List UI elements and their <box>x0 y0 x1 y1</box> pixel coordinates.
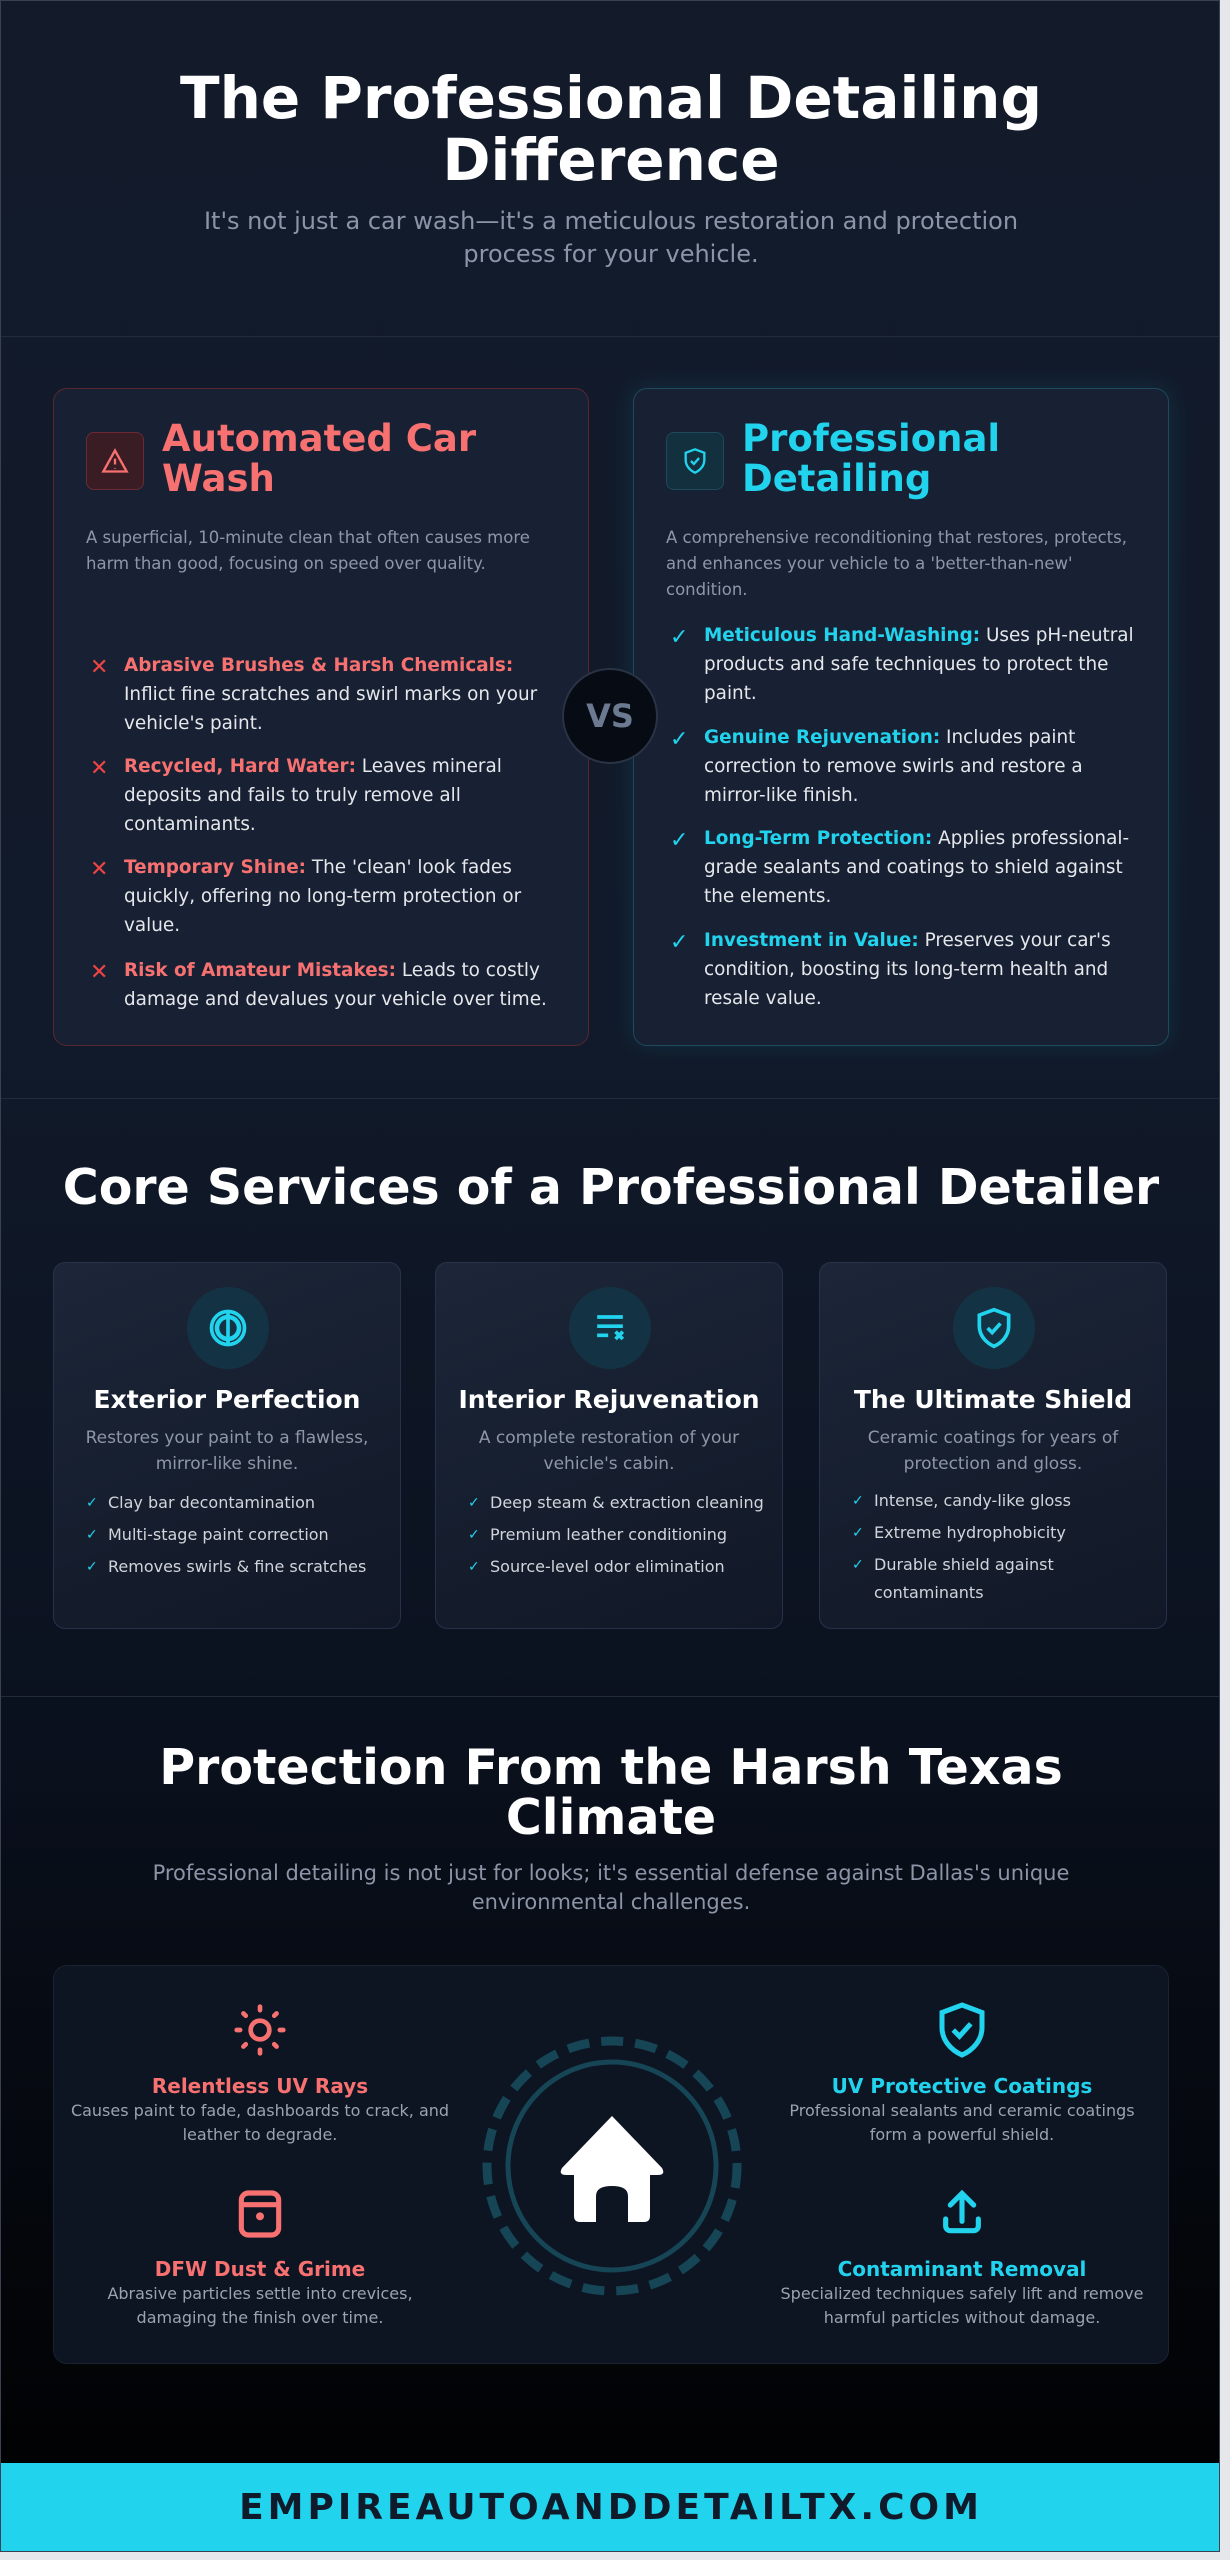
list: drawbacks: Abrasive Brushes & Harsh Chemicals: Inflict fine scratches and swirl marks on your vehicle's paint. <box>124 655 537 734</box>
icon: sun <box>234 2004 286 2056</box>
card: exterior perfection: Restores your paint to a flawless, mirror-like shine. <box>86 1428 368 1474</box>
title <box>180 64 1042 194</box>
panel: automated car wash: ✕ <box>90 756 108 781</box>
list: drawbacks: Recycled, Hard Water: Leaves mineral deposits and fails to truly remove all contaminants. <box>124 756 502 835</box>
list: benefits: Genuine Rejuvenation: Includes paint correction to remove swirls and restore a mirror-like finish. <box>704 727 1083 806</box>
icon: warning <box>86 432 144 490</box>
card: interior rejuvenation: A complete restoration of your vehicle's cabin. <box>479 1428 739 1474</box>
feature: contaminant removal <box>781 2257 1143 2327</box>
vs badge <box>562 668 658 764</box>
card: ultimate shield: Ceramic coatings for years of protection and gloss. <box>868 1428 1118 1474</box>
list: drawbacks: Temporary Shine: The 'clean' look fades quickly, offering no long-term protection or value. <box>124 857 521 936</box>
panel: climate <box>53 1965 1169 2364</box>
card: interior rejuvenation: Source-level odor elimination <box>490 1557 725 1576</box>
heading <box>162 417 476 500</box>
card: ultimate shield: Extreme hydrophobicity <box>874 1523 1066 1542</box>
card: exterior perfection: Removes swirls & fine scratches <box>108 1557 366 1576</box>
graphic: house shield <box>482 2036 742 2296</box>
heading: texas climate: Protection From the Harsh Texas <box>159 1739 1063 1796</box>
heading: texas climate <box>159 1739 1063 1846</box>
icon: shield <box>953 1287 1035 1369</box>
icon: shield check <box>940 2002 984 2058</box>
subtitle: climate: Professional detailing is not just for looks; it's essential defense against Dallas's unique environmental challenges. <box>153 1861 1069 1914</box>
panel: professional detailing: ✓ <box>670 727 688 752</box>
icon: polisher <box>187 1287 269 1369</box>
list: benefits: Investment in Value: Preserves your car's condition, boosting its long-term health and resale value. <box>704 930 1111 1009</box>
panel: professional detailing <box>633 388 1169 1046</box>
feature: uv coatings <box>789 2074 1135 2144</box>
vs badge: VS <box>586 697 634 735</box>
feature: dust: Abrasive particles settle into crevices, damaging the finish over time. <box>107 2284 413 2327</box>
heading: Detailing <box>742 457 931 500</box>
panel: automated car wash: ✕ <box>90 960 108 985</box>
panel: professional detailing: ✓ <box>670 828 688 853</box>
subtitle: It's not just a car wash—it's a meticulous restoration and protection process for your vehicle. <box>204 207 1018 268</box>
feature: uv rays <box>71 2074 449 2144</box>
panel: professional detailing: ✓ <box>670 930 688 955</box>
card: exterior perfection: Multi-stage paint correction <box>108 1525 329 1544</box>
card: exterior perfection <box>53 1262 401 1629</box>
feature: uv coatings: Professional sealants and ceramic coatings form a powerful shield. <box>789 2101 1135 2144</box>
panel: professional detailing: ✓ <box>670 625 688 650</box>
card: interior rejuvenation: Interior Rejuvenation <box>458 1385 760 1414</box>
feature: contaminant removal: Specialized techniques safely lift and remove harmful particles without damage. <box>781 2284 1143 2327</box>
footer: EMPIREAUTOANDDETAILTX.COM <box>239 2487 983 2528</box>
card: ultimate shield: Durable shield against contaminants <box>874 1555 1054 1602</box>
feature: uv coatings: UV Protective Coatings <box>832 2074 1092 2098</box>
card: exterior perfection: Clay bar decontamination <box>108 1493 315 1512</box>
feature: contaminant removal: Contaminant Removal <box>838 2257 1086 2281</box>
heading: Professional <box>742 417 1000 460</box>
icon: dust <box>238 2190 282 2238</box>
icon: list clean <box>569 1287 651 1369</box>
description: A superficial, 10-minute clean that often causes more harm than good, focusing on speed over quality. <box>86 528 530 573</box>
heading: core services: Core Services of a Professional Detailer <box>63 1159 1159 1216</box>
card: ultimate shield <box>819 1262 1167 1629</box>
feature: uv rays: Causes paint to fade, dashboards to crack, and leather to degrade. <box>71 2101 449 2144</box>
panel: automated car wash: ✕ <box>90 857 108 882</box>
card: exterior perfection: Exterior Perfection <box>94 1385 360 1414</box>
list: benefits <box>670 625 1134 1009</box>
heading: Wash <box>162 457 275 500</box>
list: drawbacks: Risk of Amateur Mistakes: Leads to costly damage and devalues your vehicle over time. <box>124 960 547 1010</box>
card: interior rejuvenation <box>435 1262 783 1629</box>
feature: dust: DFW Dust & Grime <box>155 2257 365 2281</box>
footer <box>1 2463 1221 2553</box>
card: interior rejuvenation: Deep steam & extraction cleaning <box>490 1493 764 1512</box>
list: benefits: Meticulous Hand-Washing: Uses pH-neutral products and safe techniques to protect the paint. <box>704 625 1134 704</box>
title: Difference <box>442 126 780 194</box>
title: The Professional Detailing <box>180 64 1042 132</box>
panel: automated car wash <box>53 388 589 1046</box>
heading: Automated Car <box>162 417 476 460</box>
card: ultimate shield: Intense, candy-like gloss <box>874 1491 1071 1510</box>
icon: shield <box>666 432 724 490</box>
panel: automated car wash: ✕ <box>90 655 108 680</box>
list: drawbacks <box>90 655 547 1010</box>
heading <box>742 417 1000 500</box>
icon: upload <box>943 2190 981 2234</box>
description: A comprehensive reconditioning that restores, protects, and enhances your vehicle to a 'better-than-new' condition. <box>666 528 1127 599</box>
heading: texas climate: Climate <box>506 1789 716 1846</box>
list: benefits: Long-Term Protection: Applies professional-grade sealants and coatings to shield against the elements. <box>704 828 1129 907</box>
card: interior rejuvenation: Premium leather conditioning <box>490 1525 727 1544</box>
feature: uv rays: Relentless UV Rays <box>152 2074 368 2098</box>
card: ultimate shield: The Ultimate Shield <box>854 1385 1132 1414</box>
feature: dust <box>107 2257 413 2327</box>
